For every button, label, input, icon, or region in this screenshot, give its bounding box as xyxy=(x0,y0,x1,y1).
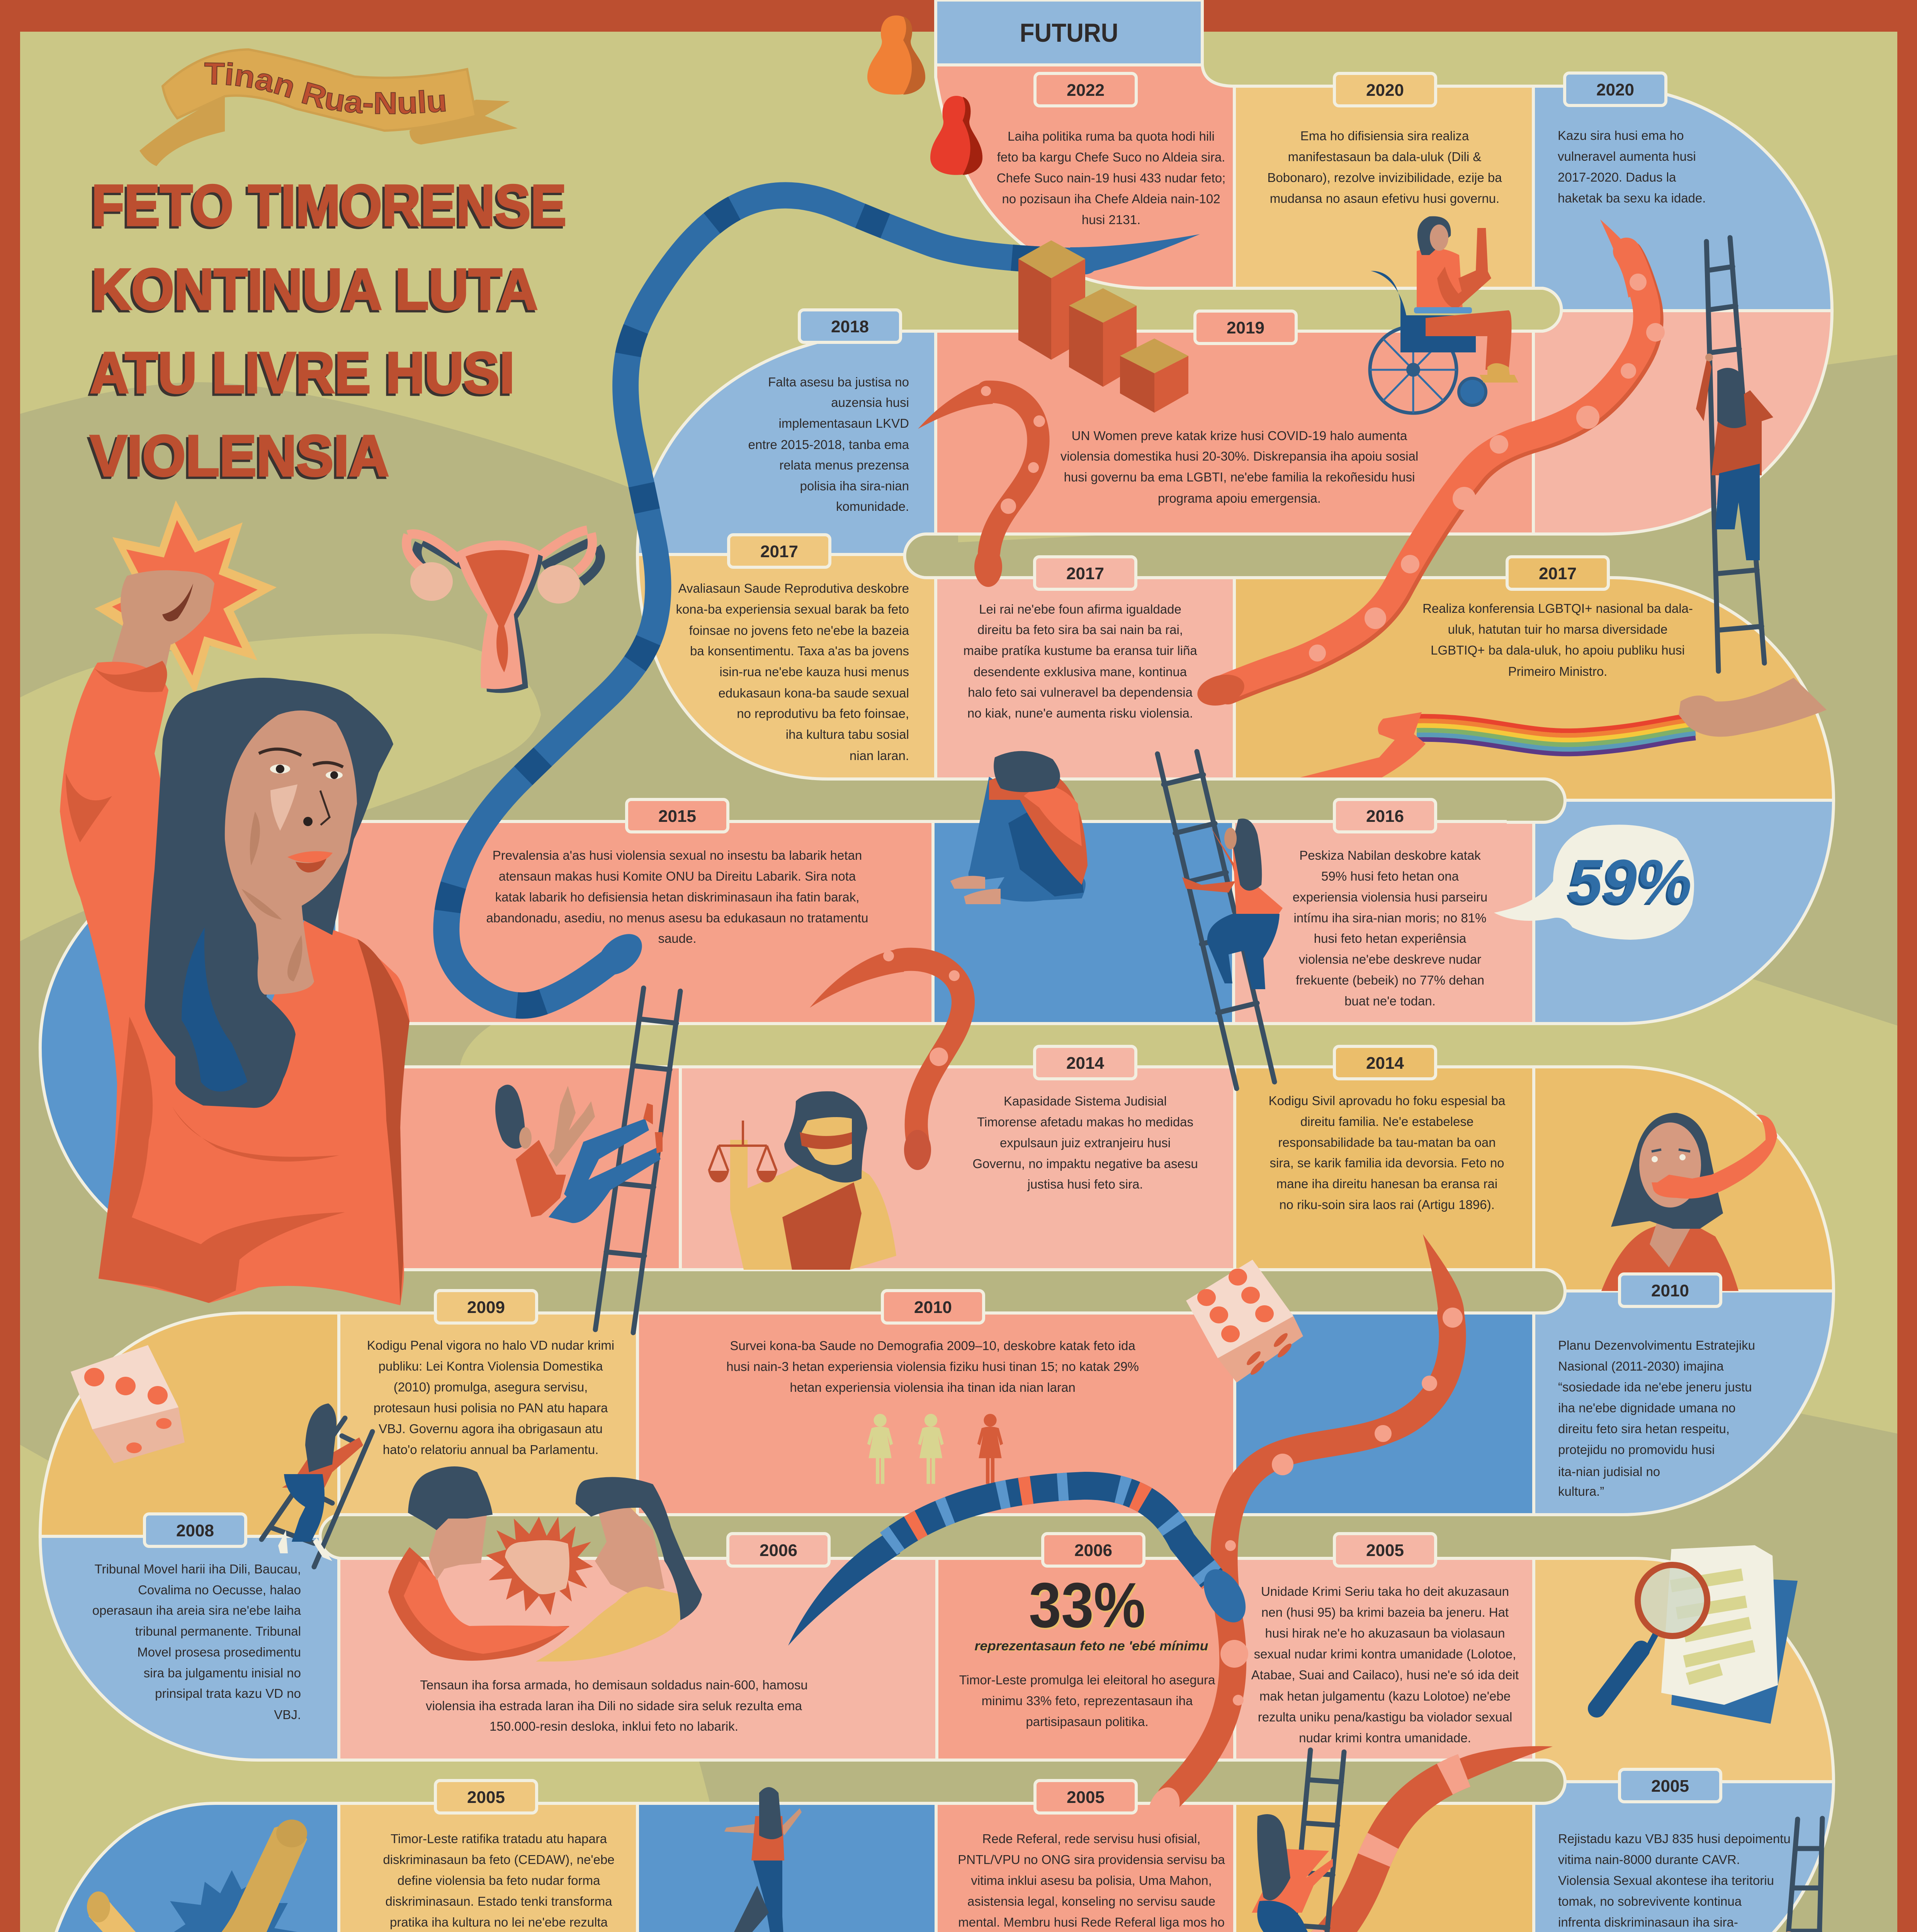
text 2017: Lei rai ne'ebe foun afirma igualdade xyxy=(979,602,1181,616)
text 2005: diskriminasaun ba feto (CEDAW), ne'ebe xyxy=(383,1852,615,1867)
panel: 2017 LGBTQI xyxy=(1234,557,1834,800)
text 2017: LGBTIQ+ ba dala-uluk, ho apoiu publiku husi xyxy=(1431,643,1685,657)
text 2010: Planu Dezenvolvimentu Estratejiku xyxy=(1558,1338,1755,1352)
panel: yellow snake xyxy=(1235,1803,1534,1932)
illustration: main woman raising fist xyxy=(60,500,410,1305)
text 2017: desendente exklusiva mane, kontinua xyxy=(974,665,1187,679)
panel: blue semicircle xyxy=(40,821,337,1270)
text 2008: Tribunal Movel harii iha Dili, Baucau, xyxy=(95,1562,301,1576)
panel: dice yellow left xyxy=(40,1313,339,1536)
badge 2016 xyxy=(1334,799,1436,832)
title: ATU LIVRE HUSI xyxy=(88,342,512,407)
text 2005: diskriminasaun. Estado tenki transforma xyxy=(386,1894,612,1908)
text 2018: entre 2015-2018, tanba ema xyxy=(748,437,909,452)
badge 2016: 2016 xyxy=(1366,807,1404,826)
panel: 2010 survey xyxy=(637,1291,1235,1515)
text 2020: Bobonaro), rezolve invizibilidade, ezije ba xyxy=(1267,170,1502,185)
badge 2005: 2005 xyxy=(1067,1788,1105,1807)
starburst xyxy=(95,500,277,695)
text 2010: direitu feto sira hetan respeitu, xyxy=(1558,1422,1730,1436)
panel: 2005 CAVR xyxy=(1534,1782,1834,1932)
big stat 33%: 33% xyxy=(1029,1570,1145,1641)
badge 2005 xyxy=(435,1781,537,1813)
illustration: falling woman xyxy=(495,1085,663,1223)
subheading: reprezentasaun feto ne 'ebé mínimu xyxy=(975,1639,1209,1654)
badge 2020 xyxy=(1334,73,1436,106)
text 2016: Peskiza Nabilan deskobre katak xyxy=(1299,848,1481,862)
badge 2010: 2010 xyxy=(914,1298,952,1317)
text 2017: direitu ba feto sira ba sai nain ba rai, xyxy=(977,622,1183,637)
badge 2020 xyxy=(1565,73,1666,105)
banner: tinan rua-nulu xyxy=(139,49,518,166)
text 2022: husi 2131. xyxy=(1082,213,1140,227)
text 2006: Tensaun iha forsa armada, ho demisaun soldadus nain-600, hamosu xyxy=(420,1678,808,1692)
panel: blue tightrope xyxy=(637,1803,936,1932)
text 2017: halo feto sai vulneravel ba dependensia xyxy=(968,685,1193,699)
badge 2014: 2014 xyxy=(1066,1054,1104,1073)
text 2005: define violensia ba feto nudar forma xyxy=(398,1873,600,1888)
panel: 2018 xyxy=(637,310,936,554)
snake head navy xyxy=(1195,1562,1254,1629)
text 2006: violensia iha estrada laran iha Dili no sidade sira seluk rezulta ema xyxy=(426,1699,802,1713)
text 2017: iha kultura tabu sosial xyxy=(786,727,909,742)
text 2005: rezulta uniku pena/kastigu ba violador sexual xyxy=(1258,1710,1512,1724)
body xyxy=(60,661,410,1305)
text 2008: prinsipal trata kazu VD no xyxy=(155,1686,301,1701)
illustration: ladder lower middle xyxy=(1282,1750,1344,1932)
badge 2017 xyxy=(1035,557,1136,589)
badges over band ends xyxy=(144,1514,1721,1932)
text 2017: maibe pratíka kustume ba eransa tuir liña xyxy=(963,643,1197,658)
text 2018: implementasaun LKVD xyxy=(778,416,909,430)
snake: orange top right xyxy=(1194,219,1665,711)
text 2014: mane iha direitu hanesan ba eransa rai xyxy=(1276,1177,1497,1191)
badges over band ends: 2008 xyxy=(176,1521,214,1540)
badges over band ends: 2005 xyxy=(1651,1777,1689,1796)
panel: 2009 xyxy=(339,1291,637,1515)
panel: gagged woman xyxy=(1534,1067,1834,1291)
text 2017: no kiak, nune'e aumenta risku violensia. xyxy=(967,706,1193,720)
text 2005: vitima inklui asesu ba polisia, Uma Mahon, xyxy=(971,1873,1212,1888)
text 2017: kona-ba experiensia sexual barak ba feto xyxy=(676,602,909,616)
text 2005: Atabae, Suai and Cailaco), husi ne'e só ida deit xyxy=(1251,1668,1519,1682)
text 2015: atensaun makas husi Komite ONU ba Direitu Labarik. Sira nota xyxy=(499,869,856,883)
text 2017: Avaliasaun Saude Reprodutiva deskobre xyxy=(678,581,909,595)
text 2009: publiku: Lei Kontra Violensia Domestika xyxy=(379,1359,603,1373)
raised arm and fist xyxy=(109,570,214,685)
text 2014: direitu familia. Ne'e estabelese xyxy=(1300,1114,1473,1129)
text 2016: intímu iha sira-nian moris; no 81% xyxy=(1294,911,1486,925)
text 2010: kultura.” xyxy=(1558,1484,1604,1498)
snake: red 2014 xyxy=(810,949,963,1170)
badge 2017 xyxy=(729,535,830,567)
badge 2017 xyxy=(1507,557,1608,589)
panel: 2017 land law xyxy=(936,557,1234,779)
illustration: wheelchair woman xyxy=(1370,216,1518,413)
text 2014: Timorense afetadu makas ho medidas xyxy=(977,1115,1193,1129)
badge 2014 xyxy=(1035,1046,1136,1079)
icon: dice right xyxy=(1186,1260,1303,1383)
text 2016: violensia ne'ebe deskreve nudar xyxy=(1299,952,1481,966)
banner: tinan rua-nulu: Tinan Rua-Nulu xyxy=(204,56,448,121)
badge 2017: 2017 xyxy=(1066,564,1104,583)
panel: blue sitting woman xyxy=(933,821,1234,1024)
text 2010: iha ne'ebe dignidade umana no xyxy=(1558,1401,1736,1415)
text 2005: infrenta diskriminasaun iha sira- xyxy=(1558,1915,1738,1929)
text 2015: Prevalensia a'as husi violensia sexual no insestu ba labarik hetan xyxy=(493,848,862,862)
text 2022: Chefe Suco nain-19 husi 433 nudar feto; xyxy=(997,171,1225,185)
text 2019: UN Women preve katak krize husi COVID-19 halo aumenta xyxy=(1072,429,1407,443)
text 2005: mak hetan julgamentu (kazu Lolotoe) ne'ebe xyxy=(1259,1689,1511,1703)
text 2020: mudansa no asaun efetivu husi governu. xyxy=(1270,191,1499,206)
illustration: ladder left xyxy=(595,988,680,1333)
panel: 2006 crisis xyxy=(339,1534,937,1760)
badge 2006 xyxy=(728,1534,829,1566)
badge 2010: 2010 xyxy=(1651,1281,1689,1300)
text 2006: 150.000-resin desloka, inklui feto no labarik. xyxy=(489,1719,738,1733)
panel: 2016 xyxy=(1234,799,1534,1024)
hair xyxy=(145,678,393,1108)
panel: 2006 quota xyxy=(937,1534,1235,1760)
badge 2019 xyxy=(1195,311,1296,344)
text 2008: sira ba julgamentu inisial no xyxy=(144,1666,301,1680)
snake: dark orange 2019 xyxy=(918,381,1045,587)
text 2010: hetan experiensia violensia iha tinan ida nian laran xyxy=(790,1380,1076,1395)
illustration: fight xyxy=(388,1466,702,1662)
icon: dice left xyxy=(71,1345,185,1463)
text 2020: vulneravel aumenta husi xyxy=(1558,149,1696,163)
icon: red pawn top xyxy=(930,96,982,175)
text 2005: sexual nudar krimi kontra umanidade (Lolotoe, xyxy=(1254,1647,1516,1661)
illustration: justice woman xyxy=(708,1091,896,1270)
text 2018: relata menus prezensa xyxy=(779,458,909,472)
text 2010: Survei kona-ba Saude no Demografia 2009–10, deskobre katak feto ida xyxy=(730,1338,1135,1353)
title: VIOLENSIA xyxy=(90,423,389,488)
panel: 59 percent xyxy=(1534,800,1834,1024)
text 2005: PNTL/VPU no ONG sira providensia servisu ba xyxy=(958,1852,1225,1867)
panel: 2005 referral xyxy=(936,1781,1235,1932)
title: ATU LIVRE HUSI xyxy=(90,340,515,405)
text 2006: minimu 33% feto, reprezentasaun iha xyxy=(982,1694,1193,1708)
text 2005: Unidade Krimi Seriu taka ho deit akuzasaun xyxy=(1261,1584,1509,1599)
text 2010: ita-nian judisial no xyxy=(1558,1464,1660,1479)
text 2009: VBJ. Governu agora iha obrigasaun atu xyxy=(379,1422,603,1436)
text 2008: operasaun iha areia sira ne'ebe laiha xyxy=(92,1603,301,1617)
panel: 2005 CEDAW xyxy=(339,1781,637,1932)
text 2018: Falta asesu ba justisa no xyxy=(768,375,909,389)
text 2020: haketak ba sexu ka idade. xyxy=(1558,191,1706,205)
panel: 2014 judicial xyxy=(680,1046,1235,1270)
text 2008: tribunal permanente. Tribunal xyxy=(135,1624,301,1638)
text 2016: 59% husi feto hetan ona xyxy=(1321,869,1459,883)
text 2005: Timor-Leste ratifika tratadu atu hapara xyxy=(391,1832,607,1846)
text 2019: violensia domestika husi 20-30%. Diskrepansia iha apoiu sosial xyxy=(1060,449,1418,463)
text 2014: responsabilidade ba tau-matan ba oan xyxy=(1278,1135,1496,1150)
badge 2015 xyxy=(627,799,728,832)
text 2016: husi feto hetan experiênsia xyxy=(1314,931,1467,946)
text 2017: no reprodutivu ba feto foinsae, xyxy=(737,706,909,721)
badge 2009 xyxy=(435,1291,537,1323)
badge 2017: 2017 xyxy=(1539,564,1577,583)
illustration: climbing woman top right xyxy=(1696,354,1773,560)
text 2017: Primeiro Ministro. xyxy=(1508,664,1607,679)
text 2020: 2017-2020. Dadus la xyxy=(1558,170,1676,184)
panel: 2017 reproductive xyxy=(637,535,936,779)
text 2009: (2010) promulga, asegura servisu, xyxy=(394,1380,588,1394)
badge 2014 xyxy=(1334,1046,1436,1079)
title: FETO TIMORENSE xyxy=(92,173,566,238)
text 2010: protejidu no promovidu husi xyxy=(1558,1442,1715,1457)
text 2009: Kodigu Penal vigora no halo VD nudar krimi xyxy=(367,1338,614,1352)
snake: big orange middle xyxy=(1143,1234,1464,1834)
heading: futuru: FUTURU xyxy=(1020,18,1118,48)
illustration: rainbow hands xyxy=(1300,678,1827,777)
text 2017: isin-rua ne'ebe kauza husi menus xyxy=(719,665,909,679)
badge 2018 xyxy=(799,310,901,342)
text 2017: ba konsentimentu. Taxa a'as ba jovens xyxy=(690,644,909,658)
badge 2005 xyxy=(1334,1534,1436,1566)
text 2014: no riku-soin sira laos rai (Artigu 1896). xyxy=(1279,1197,1495,1212)
text 2014: Kodigu Sivil aprovadu ho foku espesial ba xyxy=(1269,1094,1506,1108)
title xyxy=(88,173,566,490)
text 2005: vitima nain-8000 durante CAVR. xyxy=(1558,1852,1740,1867)
snake head blue xyxy=(590,926,650,983)
text 2008: VBJ. xyxy=(274,1708,301,1722)
illustration: magnifying glass and papers xyxy=(1597,1545,1798,1724)
badge 2005 xyxy=(1035,1781,1136,1813)
badge 2017: 2017 xyxy=(760,542,798,561)
text 2020: Kazu sira husi ema ho xyxy=(1558,128,1684,143)
text 2022: feto ba kargu Chefe Suco no Aldeia sira. xyxy=(997,150,1225,164)
text 2019: husi governu ba ema LGBTI, ne'ebe familia la rekoñesidu husi xyxy=(1064,470,1415,484)
face xyxy=(225,711,357,995)
badge 2009: 2009 xyxy=(467,1298,505,1317)
text 2005: Rejistadu kazu VBJ 835 husi depoimentu xyxy=(1558,1832,1791,1846)
text 2015: saude. xyxy=(658,931,697,946)
text 2014: Kapasidade Sistema Judisial xyxy=(1004,1094,1167,1108)
text 2018: komunidade. xyxy=(836,499,909,514)
text 2005: tomak, no sobrevivente kontinua xyxy=(1558,1894,1742,1908)
illustration: ladder top right xyxy=(1706,238,1764,671)
text 2005: nudar krimi kontra umanidade. xyxy=(1299,1731,1471,1745)
text 2017: Realiza konferensia LGBTQI+ nasional ba dala- xyxy=(1422,601,1693,616)
text 2018: auzensia husi xyxy=(831,395,909,410)
panel: 2014 civil code xyxy=(1235,1046,1534,1270)
speech bubble: 59% xyxy=(1494,825,1694,940)
path band ends xyxy=(307,288,1565,1932)
text 2009: hato'o relatoriu annual ba Parlamentu. xyxy=(383,1442,598,1457)
icon: orange pawn xyxy=(867,15,925,95)
badge 2018: 2018 xyxy=(831,317,869,336)
illustration: climber lower middle xyxy=(1252,1814,1333,1932)
illustration: gagged woman xyxy=(1601,1113,1777,1291)
badge 2022: 2022 xyxy=(1067,81,1105,100)
text 2005: pratika iha kultura no lei ne'ebe rezulta xyxy=(390,1915,608,1929)
panel: falling woman xyxy=(371,1067,680,1270)
illustration: tightrope woman and ladder xyxy=(610,1787,955,1932)
panel: 2010 plan xyxy=(1534,1291,1834,1515)
badge 2010 xyxy=(1620,1274,1721,1306)
illustration: sitting woman xyxy=(950,751,1088,904)
icons: three women xyxy=(867,1414,1003,1484)
panel: 2019 xyxy=(936,311,1533,534)
text 2006: Timor-Leste promulga lei eleitoral ho asegura xyxy=(959,1673,1215,1687)
title: FETO TIMORENSE xyxy=(89,175,564,240)
panel: 2022 xyxy=(936,65,1234,288)
text 2017: foinsae no jovens feto ne'ebe la bazeia xyxy=(689,623,909,638)
text 2020: Ema ho difisiensia sira realiza xyxy=(1300,129,1469,143)
text 2005: asistensia legal, konseling no servisu saude xyxy=(967,1894,1215,1908)
snake: navy striped xyxy=(788,1486,1254,1646)
title: KONTINUA LUTA xyxy=(89,259,535,324)
text 2016: buat ne'e todan. xyxy=(1344,994,1436,1008)
text 2005: Violensia Sexual akontese iha teritoriu xyxy=(1558,1873,1774,1888)
panel: 2020 cases xyxy=(1533,73,1832,311)
badge 2020: 2020 xyxy=(1366,81,1404,100)
badge 2006 xyxy=(1043,1534,1144,1566)
illustration: ladder center xyxy=(1157,752,1275,1088)
badge 2006: 2006 xyxy=(760,1541,797,1560)
text 2006: partisipasaun politika. xyxy=(1026,1714,1149,1729)
illustration: uterus xyxy=(406,530,600,693)
title: VIOLENSIA xyxy=(88,425,387,490)
snake: blue long xyxy=(446,195,1200,1005)
text 2016: experiensia violensia husi parseiru xyxy=(1293,890,1487,904)
text 2009: protesaun husi polisia no PAN atu hapara xyxy=(374,1401,608,1415)
subheading: reprezentasaun feto ne 'ebé mínimu xyxy=(974,1639,1208,1653)
badge 2014: 2014 xyxy=(1366,1054,1404,1073)
speech bubble: 59%: 59% xyxy=(1568,847,1692,916)
badge 2010 xyxy=(882,1291,984,1323)
text 2022: no pozisaun iha Chefe Aldeia nain-102 xyxy=(1002,192,1220,206)
text 2019: programa apoiu emergensia. xyxy=(1158,491,1321,505)
text 2005: Rede Referal, rede servisu husi ofisial, xyxy=(982,1832,1200,1846)
panel: 2008 xyxy=(40,1536,339,1760)
panel: 2015 xyxy=(337,799,933,1024)
text 2008: Covalima no Oecusse, halao xyxy=(138,1583,301,1597)
panel: blue dice xyxy=(1235,1313,1534,1515)
panel: 2020 disability xyxy=(1234,73,1533,288)
illustration: small ladder climber xyxy=(262,1403,372,1567)
panel: climbing pink xyxy=(1533,311,1832,534)
illustration: CEDAW hands xyxy=(87,1820,307,1932)
text 2016: frekuente (bebeik) no 77% dehan xyxy=(1296,973,1484,987)
badge 2020: 2020 xyxy=(1596,80,1634,99)
text 2017: edukasaun kona-ba saude sexual xyxy=(718,686,909,700)
panel: magnifying glass xyxy=(1534,1558,1834,1782)
text 2014: sira, se karik familia ida devorsia. Feto no xyxy=(1270,1156,1504,1170)
text 2014: Governu, no impaktu negative ba asesu xyxy=(972,1156,1198,1171)
text 2005: nen (husi 95) ba krimi bazeia ba jeneru. Hat xyxy=(1261,1605,1509,1619)
title: KONTINUA LUTA xyxy=(92,257,538,321)
text 2010: husi nain-3 hetan experiensia violensia fiziku husi tinan 15; no katak 29% xyxy=(726,1359,1139,1374)
badge 2015: 2015 xyxy=(658,807,696,826)
text 2022: Laiha politika ruma ba quota hodi hili xyxy=(1008,129,1215,143)
speech bubble: 59%: 59% xyxy=(1566,849,1690,918)
big stat 33%: 33% xyxy=(1030,1571,1147,1642)
text 2014: justisa husi feto sira. xyxy=(1027,1177,1143,1191)
text 2010: “sosiedade ida ne'ebe jeneru justu xyxy=(1558,1380,1752,1394)
badge 2022 xyxy=(1035,73,1136,106)
text 2005: husi hirak ne'e ho akuzasaun ba violasaun xyxy=(1265,1626,1505,1640)
panel: blue hands xyxy=(40,1803,339,1932)
text 2015: abandonadu, asediu, no menus asesu ba edukasaun no tratamentu xyxy=(486,911,868,925)
text 2014: expulsaun juiz extranjeiru husi xyxy=(1000,1136,1171,1150)
panel: futuru xyxy=(936,0,1202,65)
illustration: ladder woman 2016 xyxy=(1182,818,1283,989)
text 2015: katak labarik ho defisiensia hetan diskriminasaun iha fatin barak, xyxy=(495,890,859,904)
text 2010: Nasional (2011-2030) imajina xyxy=(1558,1359,1724,1373)
badge 2005: 2005 xyxy=(467,1788,505,1807)
badge 2006: 2006 xyxy=(1074,1541,1112,1560)
text 2020: manifestasaun ba dala-uluk (Dili & xyxy=(1288,150,1481,164)
text 2008: Movel prosesa prosedimentu xyxy=(137,1645,301,1659)
text 2017: nian laran. xyxy=(850,748,909,763)
chart: cubes xyxy=(1018,240,1188,413)
badge 2005: 2005 xyxy=(1366,1541,1404,1560)
snake: lower banded xyxy=(926,1746,1553,1932)
text 2018: polisia iha sira-nian xyxy=(800,479,909,493)
text 2017: uluk, hatutan tuir ho marsa diversidade xyxy=(1448,622,1667,636)
badge 2019: 2019 xyxy=(1227,318,1264,337)
text 2005: mental. Membru husi Rede Referal liga mos ho xyxy=(958,1915,1225,1929)
illustration: ladder lower right xyxy=(1763,1818,1822,1932)
panel: 2005 crimes unit xyxy=(1235,1534,1534,1760)
illustration: climber lower right xyxy=(1767,1931,1847,1932)
